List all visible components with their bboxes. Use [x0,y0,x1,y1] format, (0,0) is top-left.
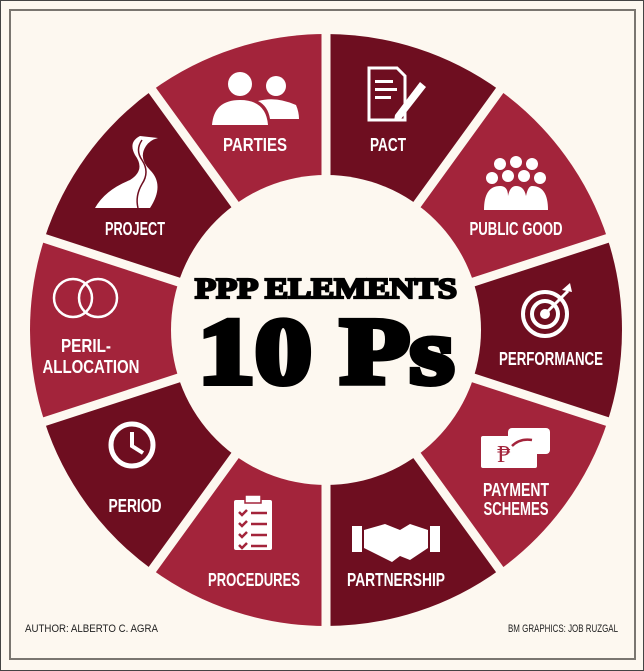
segment: partnership: PARTNERSHIP [347,570,445,590]
segment: payment schemes: PAYMENT [483,480,549,500]
segment: payment schemes: ₱ [497,442,511,468]
segment: project [95,136,165,239]
segment: parties: PARTIES [223,135,287,155]
segment: procedures [208,495,300,590]
segment: public good: PUBLIC GOOD [470,219,562,239]
segment: peril-allocation: PERIL- [61,336,111,356]
segment: performance [499,283,603,369]
footer credits [25,623,618,635]
segment: parties [212,72,299,155]
title [195,274,457,404]
segment: pact [369,68,426,155]
segment: period [108,424,162,516]
segment: peril-allocation: ALLOCATION [42,357,140,377]
segment: procedures: PROCEDURES [208,570,300,590]
segment: period: PERIOD [108,496,162,516]
title: 10 Ps [198,300,454,404]
segment: partnership [347,524,445,590]
segment: project: PROJECT [105,219,165,239]
segment: payment schemes: SCHEMES [484,499,548,519]
title: PPP ELEMENTS [195,274,457,305]
segment: peril-allocation [42,279,140,377]
segment: performance: PERFORMANCE [499,349,603,369]
segment: public good [470,156,562,239]
segment: payment schemes [481,428,550,519]
segment: pact: PACT [370,135,406,155]
footer credits: AUTHOR: ALBERTO C. AGRA [25,623,159,635]
